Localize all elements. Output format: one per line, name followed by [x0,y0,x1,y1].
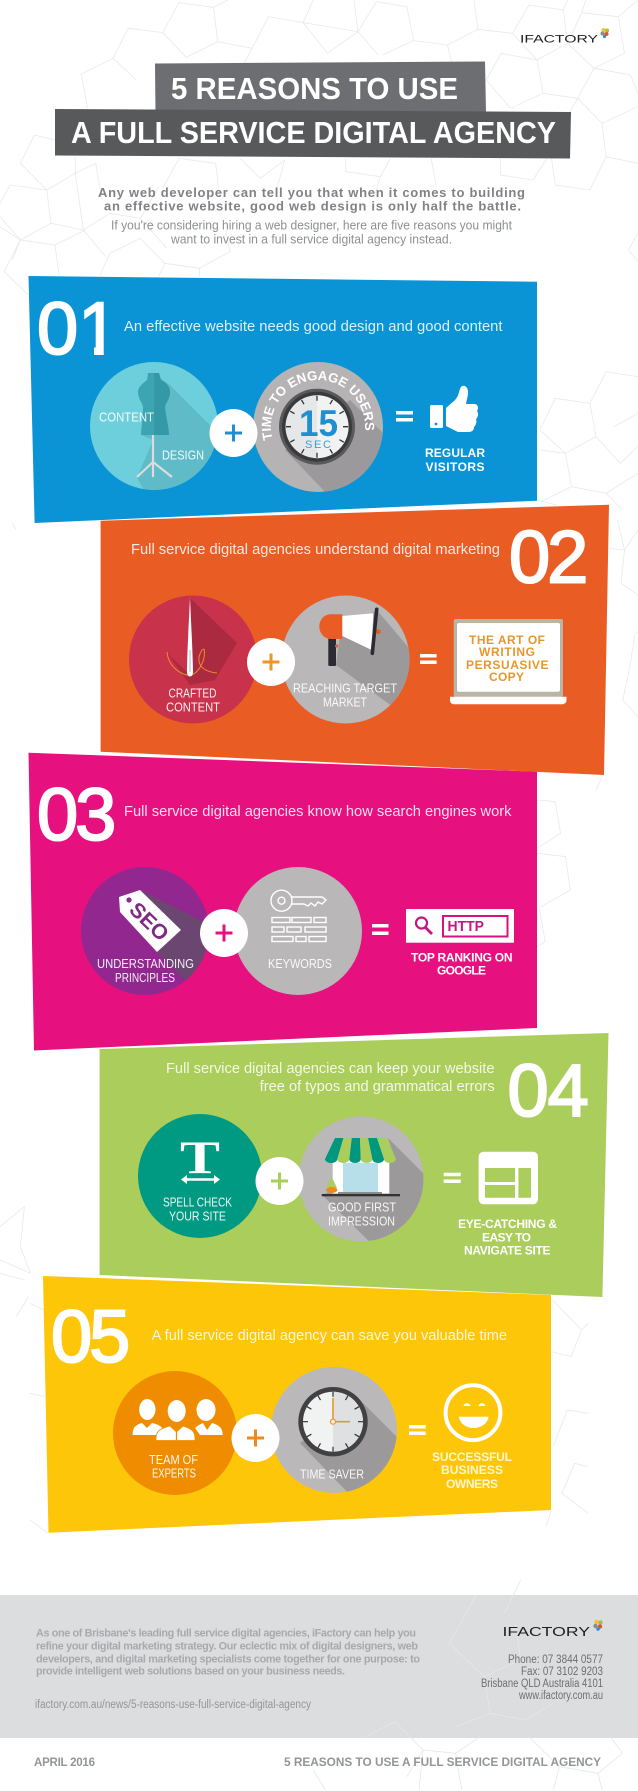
result: top ranking on google [411,950,512,978]
circle: reaching target market: REACHING TARGET [293,680,397,696]
panel 5 background [43,1276,551,1533]
footer: date: APRIL 2016 [34,1757,95,1769]
panel 5: contents [51,1295,512,1500]
panel 2 background [101,505,609,775]
result: eye-catching: EASY TO [482,1230,531,1244]
title: A FULL SERVICE DIGITAL AGENCY [71,116,556,150]
circle: spell check [138,1114,262,1238]
result: regular visitors: VISITORS [426,460,484,474]
footer: link: ifactory.com.au/news/5-reasons-use-full-service-digital-agency [35,1699,311,1711]
footer: body text: provide intelligent web solutions based on your business needs. [36,1666,345,1678]
result: successful business owners [432,1450,512,1491]
number 02: 02 [509,516,585,598]
logo: top [520,28,609,46]
intro: light text: If you're considering hiring a web designer, here are five reasons you might [111,218,512,232]
footer: contact details: www.ifactory.com.au [518,1690,603,1702]
circle: storefront: GOOD FIRST [328,1200,396,1214]
result: top ranking on google: TOP RANKING ON [411,950,512,964]
intro: bold text: Any web developer can tell you that when it comes to building [98,185,525,200]
panel 1 background [28,276,537,523]
plus [256,1157,304,1205]
result: successful business owners: SUCCESSFUL [432,1450,512,1464]
circle: reaching target market: MARKET [323,694,367,710]
plus [247,638,295,686]
logo: footer [502,1620,603,1639]
logo: footer: IFACTORY [502,1625,591,1639]
panel 1: contents [38,301,502,492]
icon: laptop with persuasive copy: WRITING [479,645,535,659]
footer band [0,1595,638,1738]
heading 04: Full service digital agencies can keep your website [166,1061,494,1077]
result: top ranking on google: GOOGLE [437,964,486,978]
icon: search bar: HTTP [448,918,484,935]
result: successful business owners: OWNERS [446,1477,498,1491]
icon: laptop with persuasive copy: PERSUASIVE [466,658,548,672]
circle: keywords [234,867,362,995]
heading 04 [166,1061,495,1095]
result: eye-catching [458,1217,557,1258]
heading 02: Full service digital agencies understand digital marketing [131,542,500,558]
footer: contact details: Fax: 07 3102 9203 [521,1666,603,1678]
circle: team of experts: TEAM OF [149,1452,198,1467]
result: regular visitors: REGULAR [425,446,485,460]
icon: laptop with persuasive copy: COPY [489,670,524,684]
circle: spell check: SPELL CHECK [163,1194,232,1210]
panel 4 background [100,1033,608,1297]
circle: SEO tag [81,867,210,995]
equals [372,924,388,935]
heading 05: A full service digital agency can save you valuable time [152,1328,507,1344]
equals [396,411,413,422]
circle: crafted content: CRAFTED [168,686,216,700]
circle: spell check: T [180,1132,220,1184]
number 05: 05 [51,1295,128,1378]
circle: storefront [300,1116,424,1242]
icon: laptop with persuasive copy: THE ART OF [469,633,545,647]
circle: 15 sec clock [254,362,383,492]
footer: body text [36,1628,420,1678]
icon: smiley [446,1385,500,1440]
intro: bold text: an effective website, good web design is only half the battle. [104,198,521,214]
circle: keywords: KEYWORDS [268,956,332,971]
circle: mannequin: CONTENT [99,410,154,424]
circle: time saver clock: TIME SAVER [300,1466,364,1482]
result: eye-catching: EYE-CATCHING & [458,1217,557,1231]
footer: body text: developers, and digital marketing specialists come together for one purpose: to [36,1654,420,1666]
intro: bold text [98,185,525,214]
footer: contact details [481,1654,603,1702]
heading 03: Full service digital agencies know how search engines work [124,804,512,820]
circle: 15 sec clock: TIME TO ENGAGE USERS [262,371,374,441]
circle: 15 sec clock: 15 [299,403,338,444]
result: successful business owners: BUSINESS [441,1463,503,1477]
logo: top: IFACTORY [520,34,599,46]
title: 5 REASONS TO USE [171,72,458,106]
circle: 15 sec clock: SEC [305,439,331,451]
circle: time saver clock [271,1367,400,1500]
icon: thumbs up [430,386,478,432]
equals [420,654,437,664]
result: regular visitors [425,446,485,474]
intro: light text: want to invest in a full service digital agency instead. [170,232,452,246]
number 03: 03 [37,773,113,856]
intro: light text [111,218,512,246]
icon: laptop with persuasive copy [450,619,566,704]
number 04: 04 [508,1049,588,1132]
circle: mannequin: DESIGN [162,448,204,462]
number 01: 01 [37,287,119,370]
circle: mannequin [90,362,217,490]
icon: page layout [479,1152,538,1204]
circle: storefront: IMPRESSION [328,1214,395,1228]
heading 04: free of typos and grammatical errors [260,1079,495,1095]
footer: contact details: Brisbane QLD Australia 4101 [481,1678,603,1690]
panel 4: contents [138,1049,588,1258]
circle: team of experts [113,1371,237,1495]
plus [232,1414,280,1462]
circle: team of experts: EXPERTS [152,1466,196,1481]
equals [409,1425,426,1435]
footer: body text: refine your digital marketing strategy. Our eclectic mix of digital designers, web [36,1641,418,1653]
equals [444,1173,461,1183]
circle: crafted content [129,596,257,724]
circle: reaching target market [282,596,415,724]
icon: search bar [406,909,514,943]
panel 3 background [28,753,537,1050]
circle: SEO tag: SEO [125,898,173,946]
plus [210,409,258,457]
panel 2: contents [129,516,585,724]
title [55,62,571,158]
result: eye-catching: NAVIGATE SITE [464,1244,550,1258]
circle: SEO tag: UNDERSTANDING [97,956,194,971]
circle: SEO tag: PRINCIPLES [115,970,175,985]
footer: contact details: Phone: 07 3844 0577 [508,1654,603,1666]
footer: body text: As one of Brisbane's leading full service digital agencies, iFactory can help you [36,1628,416,1640]
footer: title: 5 REASONS TO USE A FULL SERVICE DIGITAL AGENCY [284,1755,601,1769]
plus [200,909,248,957]
circle: crafted content: CONTENT [166,700,220,714]
heading 01: An effective website needs good design and good content [124,319,502,335]
panel 3: contents [37,773,514,995]
circle: spell check: YOUR SITE [169,1208,226,1224]
